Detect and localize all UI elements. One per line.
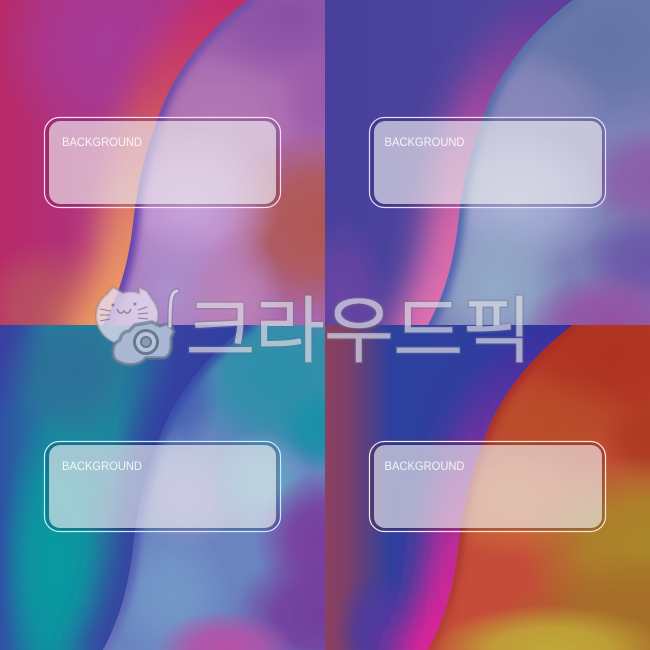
card label: BACKGROUND <box>384 135 465 149</box>
panel: bottom-right orange gradient <box>325 325 650 650</box>
wave shape: bottom-left <box>103 325 325 650</box>
icon: cat head <box>96 287 158 345</box>
watermark wordmark: 크라우드픽 <box>186 272 532 377</box>
panel: top-left magenta gradient <box>0 0 325 325</box>
card label: BACKGROUND <box>62 459 142 473</box>
glass card: top-right <box>370 118 606 208</box>
card label: BACKGROUND <box>62 135 142 149</box>
glass card: bottom-right <box>370 442 606 532</box>
watermark logo <box>96 272 532 377</box>
wave shape: top-left <box>103 0 325 325</box>
wave shape: bottom-right <box>428 325 650 650</box>
glass card: top-left <box>44 118 280 208</box>
icon: bracket stroke <box>170 291 177 326</box>
icon: camera <box>113 322 174 365</box>
wave shape: top-right <box>428 0 650 325</box>
icon: bracket highlight <box>170 291 177 326</box>
panel: bottom-left teal gradient <box>0 325 325 650</box>
glass card: bottom-left <box>44 442 280 532</box>
card label: BACKGROUND <box>384 459 465 473</box>
panel: top-right indigo gradient <box>325 0 650 325</box>
